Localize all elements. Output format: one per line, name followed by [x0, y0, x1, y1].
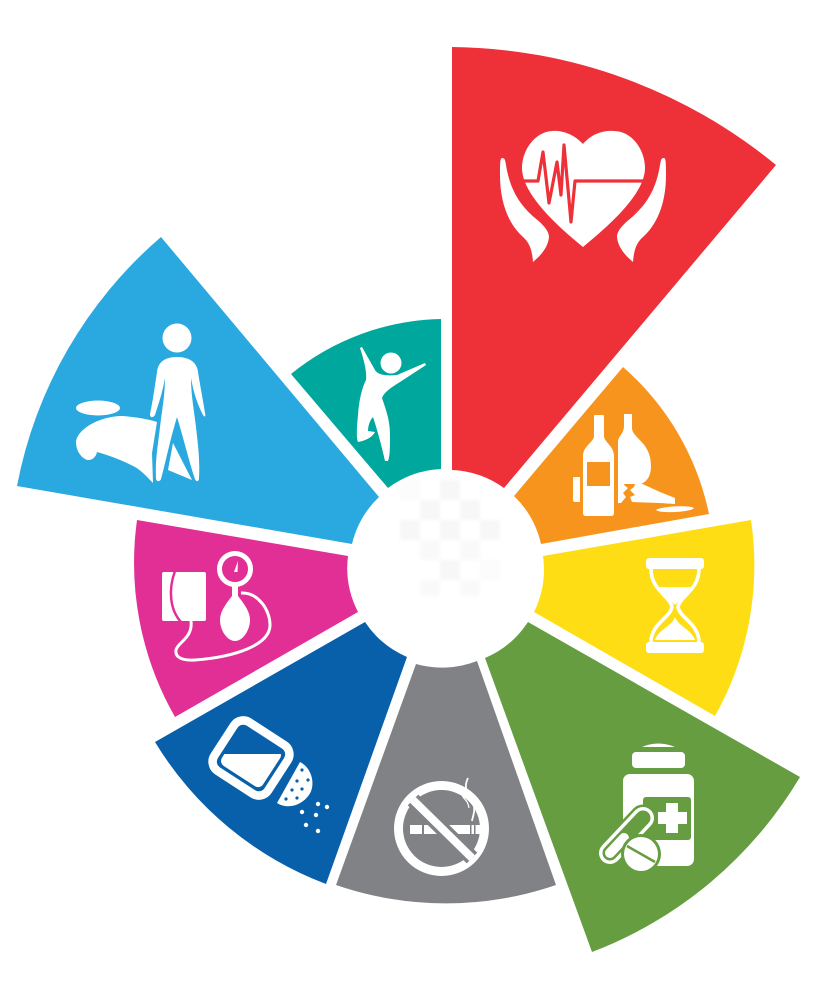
icon: blood pressure monitor	[162, 554, 270, 660]
panel: orange alcohol segment	[514, 367, 709, 544]
icon: no smoking	[398, 778, 484, 872]
icon: heart in hands	[500, 131, 666, 262]
wedge: magenta	[134, 520, 358, 717]
icon: hourglass	[646, 558, 704, 653]
wedge: orange	[514, 367, 709, 544]
icon: jumping figure	[357, 347, 426, 461]
icon: medicine bottle and pills	[610, 744, 694, 874]
icon: person beside bed	[76, 324, 205, 483]
icon: bottles	[573, 414, 694, 516]
panel: yellow hourglass segment	[534, 520, 754, 716]
wedge: teal	[291, 319, 441, 488]
wedge: green	[485, 622, 800, 952]
panel: magenta blood pressure segment	[134, 520, 358, 717]
panel: red heart segment	[452, 47, 776, 488]
wedge: sky blue	[17, 237, 379, 544]
panel: sky blue obesity segment	[17, 237, 379, 544]
panel: grey smoking segment	[336, 661, 556, 903]
panel: teal physical activity segment	[291, 319, 441, 488]
icon: salt shaker	[208, 716, 329, 833]
wedge: yellow	[534, 520, 754, 716]
wedge: red	[452, 47, 776, 488]
panel: green medication segment	[485, 622, 800, 952]
wedge: blue	[155, 622, 407, 884]
wedge: grey	[336, 661, 556, 903]
panel: blue salt segment	[155, 622, 407, 884]
centre hole with faint checker	[400, 480, 500, 596]
